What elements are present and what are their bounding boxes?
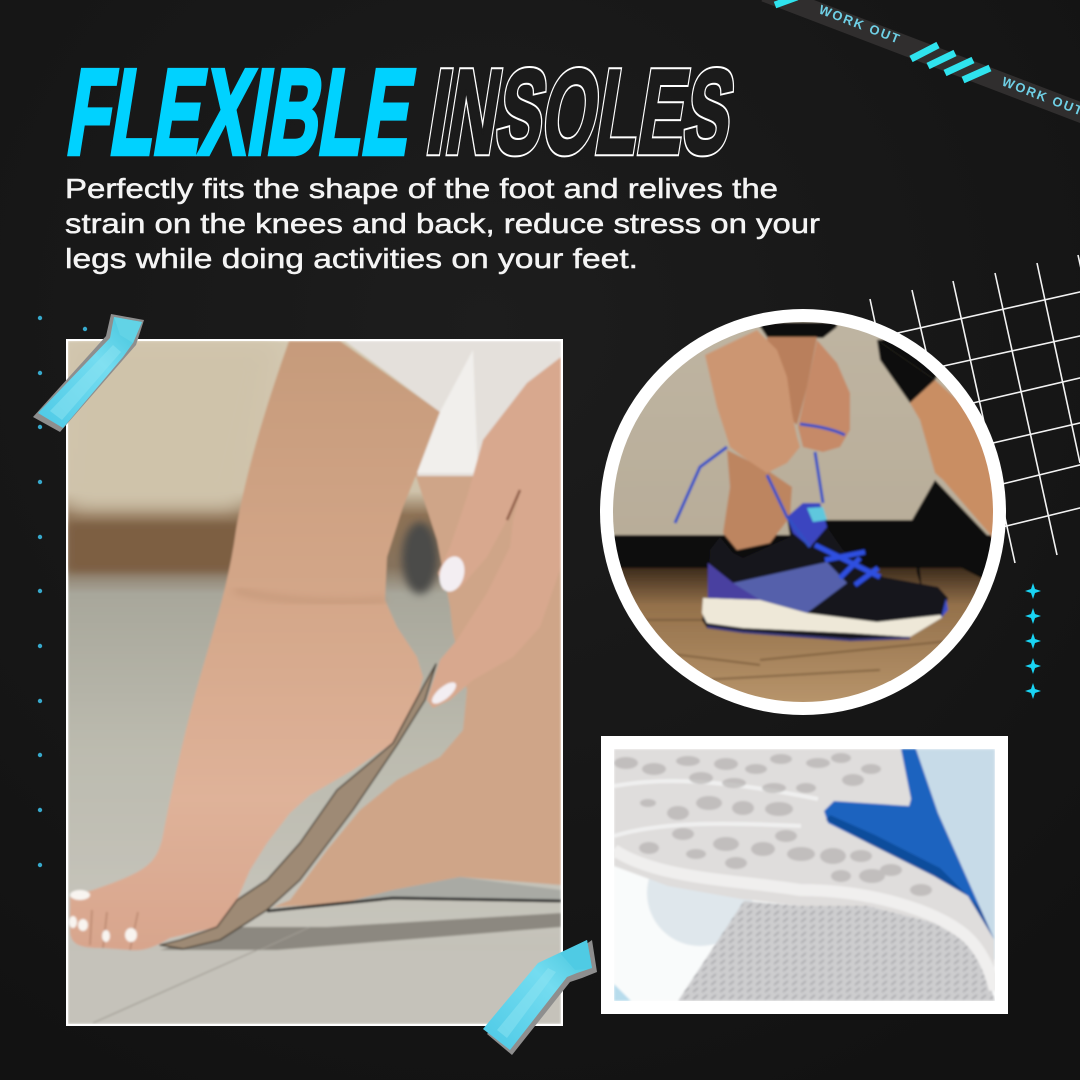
title word: insoles outlined [420, 45, 743, 179]
blue arch support [822, 749, 986, 922]
arrow sticker: bottom right [483, 940, 597, 1055]
decorative tape: work out: WORK OUT [817, 2, 902, 46]
insole rim [614, 850, 995, 990]
description text: legs while doing activities on your feet. [65, 243, 638, 274]
other person's black sleeve [877, 340, 935, 403]
tongue [787, 503, 827, 547]
lower leg [723, 450, 792, 550]
title [60, 45, 743, 181]
right hand [798, 340, 850, 452]
arrow sticker: top left [33, 314, 144, 432]
fingernails [430, 555, 466, 706]
background circle [646, 879, 752, 946]
sneaker side panel [708, 562, 847, 613]
other person's arm [910, 380, 1000, 540]
decorative grid [870, 255, 1080, 563]
description text [65, 173, 820, 274]
blurred dark object behind legs [402, 522, 438, 594]
photo panel: foot with insole [66, 339, 563, 1026]
description text: Perfectly fits the shape of the foot and relives the [65, 173, 778, 204]
title word: flexible: FLEXIBLE [60, 45, 423, 181]
toe separators [90, 910, 138, 950]
insole cushioned surface [614, 749, 995, 966]
high heel [912, 480, 992, 590]
floor plank lines [620, 620, 960, 680]
description text: strain on the knees and back, reduce stress on your [65, 208, 820, 239]
insole [160, 664, 436, 949]
decorative sparkles [1025, 583, 1041, 699]
decorative tape: work out [765, 0, 1080, 118]
left hand [705, 330, 800, 473]
title word: insoles outlined: INSOLES [420, 45, 743, 179]
photo: tying shoelaces, circular frame [600, 309, 1010, 718]
mesh underside [678, 901, 995, 1001]
sneaker upper [701, 520, 949, 640]
decorative dots [38, 316, 87, 867]
photo panel: insole material close-up [601, 736, 1008, 1014]
foot and raised leg [70, 341, 440, 950]
hand [427, 357, 561, 708]
sneaker sole [702, 598, 943, 637]
white clothing [345, 341, 561, 476]
title word: insoles outlined: INSOLES [420, 45, 743, 179]
floor tiles and shadow [69, 1001, 560, 1024]
black top [757, 322, 837, 338]
pad dimples [614, 753, 932, 896]
back leg and foot [273, 473, 561, 907]
forearm behind [767, 337, 817, 425]
toenails [69, 890, 137, 942]
laces [675, 424, 845, 547]
